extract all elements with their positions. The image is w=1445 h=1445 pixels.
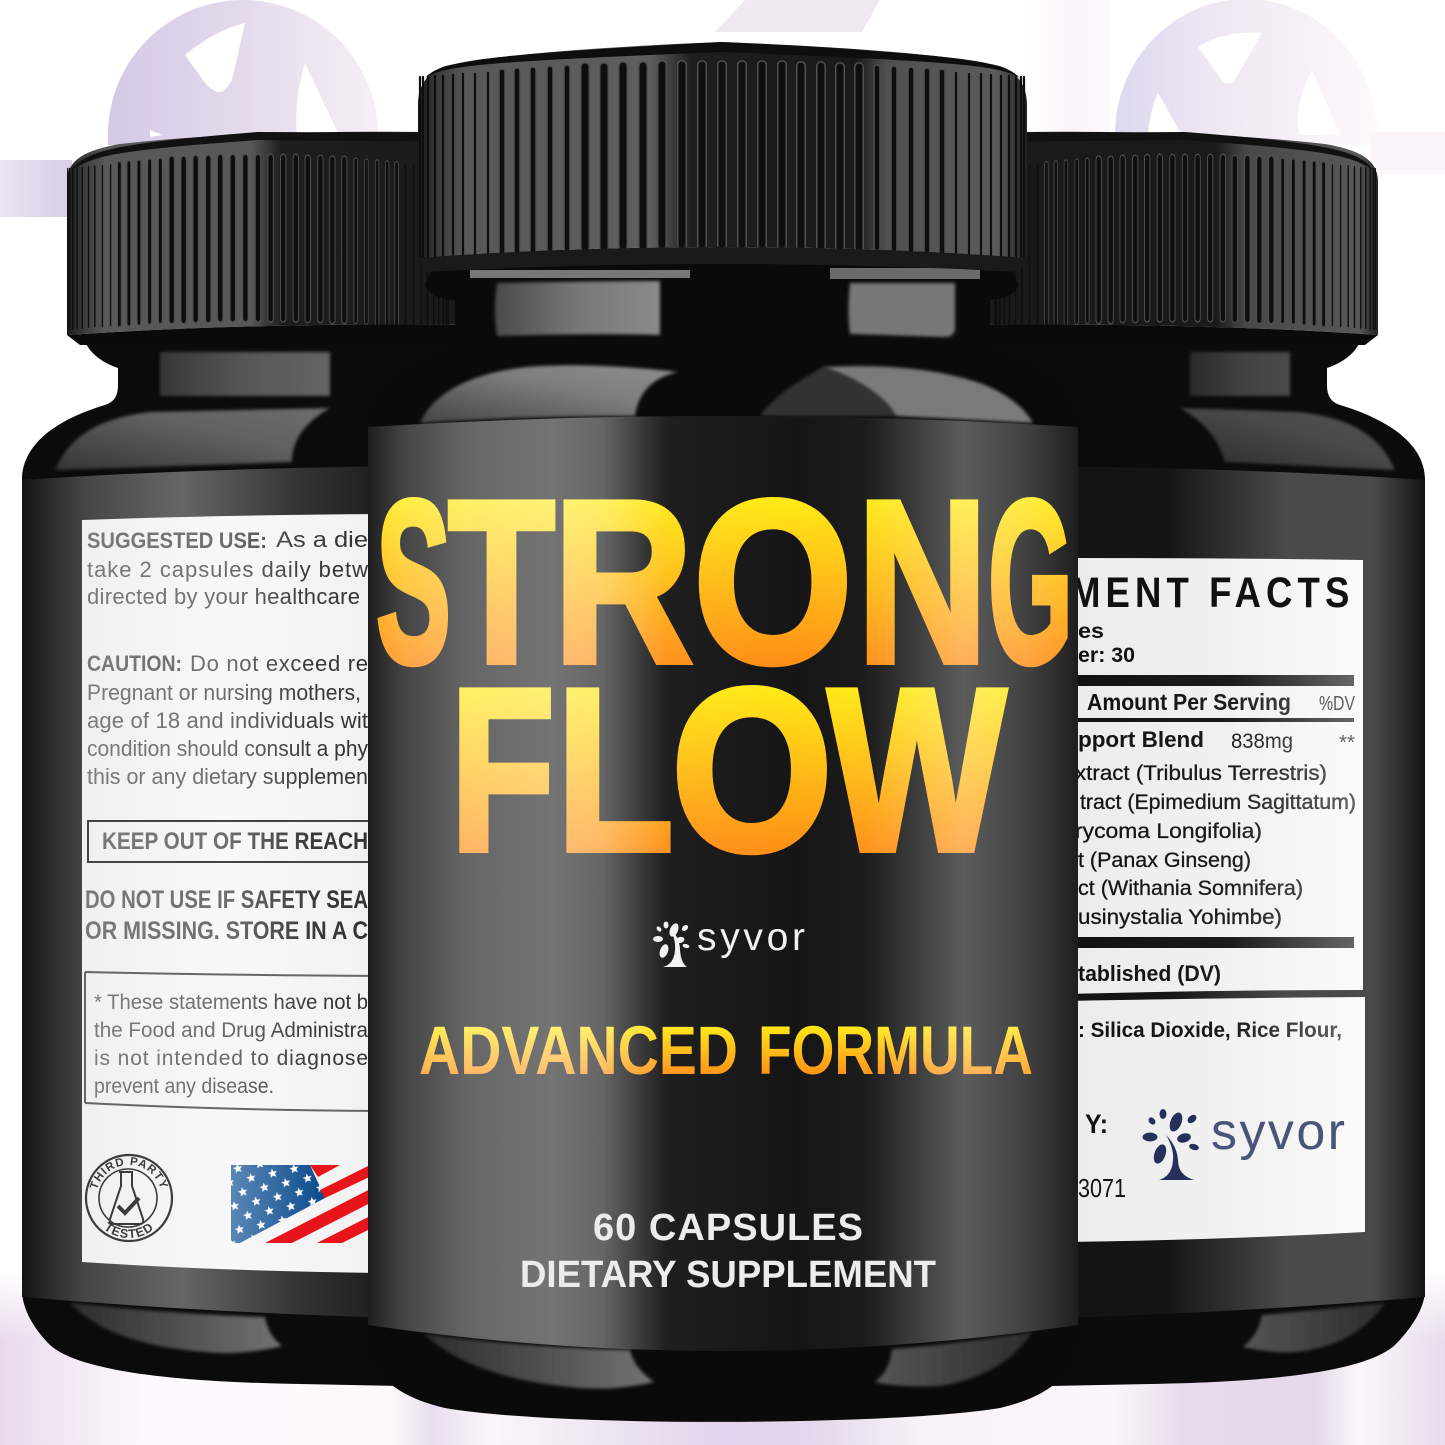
title: STRONG: S bbox=[376, 453, 451, 712]
subtitle: advanced formula: FORMULA bbox=[758, 1012, 1033, 1089]
right cap ribs bbox=[995, 158, 1375, 329]
column header: Amount Per Serving bbox=[1087, 689, 1291, 715]
title: STRONG: O bbox=[693, 453, 853, 712]
caution text: this or any dietary supplemen bbox=[87, 764, 368, 789]
left label white bbox=[82, 514, 380, 1273]
logo: syvor white bbox=[653, 916, 805, 967]
title: FLOW: O bbox=[671, 641, 833, 900]
right label white top bbox=[1065, 558, 1363, 994]
center bottle: strong flow bbox=[368, 42, 1078, 1422]
caution text: age of 18 and individuals wit bbox=[87, 708, 368, 733]
left neck highlight bbox=[160, 352, 330, 396]
ingredient list: ct (Withania Somnifera) bbox=[1078, 877, 1303, 900]
blend row: ** bbox=[1339, 732, 1355, 754]
gym wheel left bbox=[108, 0, 378, 145]
keep out of reach box bbox=[88, 821, 380, 862]
right cap bbox=[970, 132, 1378, 335]
serving info: es bbox=[1078, 620, 1104, 643]
right neck highlight bbox=[848, 283, 955, 337]
blend row: 838mg bbox=[1231, 730, 1293, 753]
FDA disclaimer box: prevent any disease. bbox=[94, 1075, 274, 1098]
safety seal warning bbox=[85, 886, 368, 945]
dietary supplement: DIETARY SUPPLEMENT bbox=[520, 1254, 936, 1296]
icon: tree bbox=[1142, 1109, 1200, 1180]
right bottom highlight bbox=[1243, 1303, 1385, 1352]
FDA disclaimer box: * These statements have not b bbox=[94, 991, 368, 1014]
left neck highlight bbox=[495, 281, 660, 336]
right cap rim bbox=[970, 324, 1378, 345]
supplement facts text: er: 30 bbox=[1078, 644, 1135, 667]
right bottle body bbox=[970, 335, 1425, 1386]
icon: third party tested seal: TESTED bbox=[106, 1222, 152, 1238]
left bottle: suggested use bbox=[22, 132, 455, 1386]
blend row bbox=[1078, 727, 1355, 754]
suggested use text: take 2 capsules daily betw bbox=[87, 557, 368, 582]
title: FLOW: W bbox=[828, 641, 1006, 900]
right label white bottom bbox=[1065, 997, 1365, 1242]
title: FLOW: F bbox=[450, 641, 555, 900]
ingredient list: tract (Epimedium Sagittatum) bbox=[1080, 791, 1356, 814]
other ingredients: : Silica Dioxide, Rice Flour, bbox=[1078, 1019, 1342, 1042]
center label bbox=[368, 416, 1078, 1351]
ingredient list: usinystalia Yohimbe) bbox=[1078, 906, 1282, 929]
center cap rim bbox=[418, 247, 1027, 272]
center cap bbox=[418, 42, 1027, 258]
suggested use text: directed by your healthcare bbox=[87, 584, 360, 609]
left cap bbox=[67, 132, 480, 335]
right shoulder highlight bbox=[1180, 408, 1395, 470]
thick rule lower bbox=[1078, 937, 1354, 948]
bottom left highlight bbox=[424, 1334, 654, 1389]
icon: american flag bbox=[231, 1160, 380, 1243]
ingredient list: t (Panax Ginseng) bbox=[1078, 849, 1251, 872]
center cap ribs bbox=[420, 65, 1024, 257]
safety seal warning: OR MISSING. STORE IN A C bbox=[85, 917, 368, 945]
blend row: pport Blend bbox=[1078, 727, 1204, 752]
capsule count: 60 CAPSULES bbox=[593, 1207, 863, 1249]
left shoulder highlight bbox=[420, 365, 678, 423]
center bottle body bbox=[368, 250, 1078, 1422]
left shoulder highlight bbox=[55, 408, 330, 470]
suggested use text: As a die bbox=[276, 527, 368, 552]
wordmark: syvor bbox=[1211, 1103, 1345, 1161]
title: STRONG: R bbox=[553, 453, 693, 712]
heading: MENT FACTS bbox=[1070, 569, 1354, 617]
right label dark bbox=[1030, 466, 1425, 1320]
keep out of reach box: KEEP OUT OF THE REACH bbox=[102, 828, 368, 855]
subtitle: advanced formula: ADVANCED bbox=[419, 1012, 738, 1089]
gym wheel right bbox=[1115, 0, 1377, 145]
FDA disclaimer box: is not intended to diagnose bbox=[94, 1047, 368, 1070]
zip code: 3071 bbox=[1078, 1173, 1126, 1203]
bottom right highlight bbox=[875, 1332, 1032, 1386]
icon: third party tested seal: THIRD PARTY bbox=[89, 1157, 168, 1188]
gym bar right bbox=[1370, 132, 1445, 174]
caution text: condition should consult a phy bbox=[87, 736, 368, 761]
left cap ribs bbox=[68, 158, 448, 329]
distributed by: Y: bbox=[1085, 1109, 1108, 1139]
caution text: Do not exceed re bbox=[190, 651, 368, 676]
logo: syvor navy bbox=[1142, 1103, 1345, 1180]
caution text: Pregnant or nursing mothers, bbox=[87, 680, 361, 705]
right shoulder bright highlight bbox=[823, 366, 1033, 423]
text: G bbox=[988, 453, 1073, 712]
cap top edge bbox=[425, 42, 1020, 78]
ingredient list: rycoma Longifolia) bbox=[1075, 820, 1262, 843]
FDA disclaimer box bbox=[85, 972, 380, 1111]
thin rule bbox=[1078, 718, 1354, 722]
left label dark bbox=[22, 466, 420, 1320]
caution text: CAUTION: bbox=[87, 651, 182, 676]
supplement facts text bbox=[1070, 569, 1356, 1203]
title: STRONG: T bbox=[448, 453, 555, 712]
suggested use text bbox=[87, 527, 368, 609]
right shoulder dim highlight bbox=[760, 367, 896, 416]
right cap top edge bbox=[970, 132, 1373, 170]
right neck highlight bbox=[1190, 352, 1290, 396]
column header: %DV bbox=[1319, 693, 1356, 715]
left label text bbox=[85, 527, 380, 1111]
safety seal warning: DO NOT USE IF SAFETY SEA bbox=[85, 886, 368, 914]
gym bar left bbox=[0, 160, 72, 217]
floor bbox=[0, 1270, 1445, 1445]
ingredient list: xtract (Tribulus Terrestris) bbox=[1075, 762, 1327, 785]
left bottom highlight bbox=[70, 1303, 282, 1353]
suggested use text: SUGGESTED USE: bbox=[87, 528, 267, 553]
right bottle: supplement facts bbox=[970, 132, 1425, 1386]
FDA disclaimer box: the Food and Drug Administra bbox=[94, 1019, 368, 1042]
left cap top edge bbox=[72, 132, 480, 170]
title: FLOW: L bbox=[556, 641, 674, 900]
thick rule bbox=[1078, 675, 1354, 686]
icon: third party tested seal bbox=[84, 1154, 174, 1242]
left bottle body bbox=[22, 335, 480, 1386]
left cap rim bbox=[67, 324, 480, 345]
wordmark: syvor bbox=[697, 916, 805, 959]
title: STRONG: N bbox=[857, 453, 988, 712]
caution text bbox=[87, 651, 368, 789]
ingredient list bbox=[1075, 762, 1356, 929]
rim highlights bbox=[470, 268, 980, 279]
DV note: tablished (DV) bbox=[1078, 961, 1221, 986]
icon: tree bbox=[653, 922, 690, 967]
